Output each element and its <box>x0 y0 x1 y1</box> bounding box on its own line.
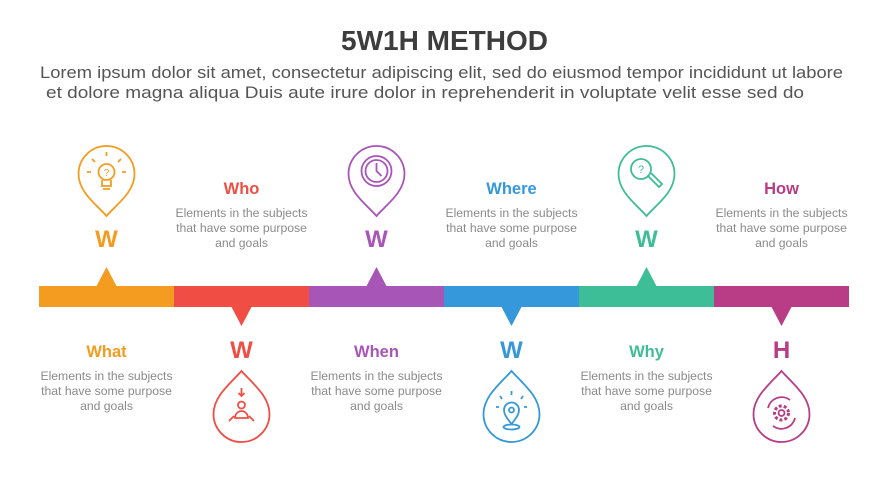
text: when: and goals <box>350 399 403 413</box>
text: why <box>580 343 713 413</box>
text: where: and goals <box>485 236 538 250</box>
icon: what pin (lightbulb): ? <box>104 168 110 179</box>
title: 5W1H METHOD <box>341 25 548 56</box>
text: who: Elements in the subjects <box>175 206 308 220</box>
text: how <box>715 180 848 250</box>
text: why: that have some purpose <box>581 384 712 398</box>
text: what <box>40 343 173 413</box>
subtitle: et dolore magna aliqua Duis aute irure dolor in reprehenderit in voluptate velit esse sed do <box>46 84 804 102</box>
text: who: Who <box>224 180 259 198</box>
text: how: How <box>764 180 799 198</box>
text: what: Elements in the subjects <box>40 369 173 383</box>
letter why: W <box>635 226 658 253</box>
icon: who drop (person) <box>213 371 270 442</box>
text: how: Elements in the subjects <box>715 206 848 220</box>
letter how: H <box>773 337 790 364</box>
text: how: that have some purpose <box>716 221 847 235</box>
text: what: that have some purpose <box>41 384 172 398</box>
icon: what pin (lightbulb) <box>78 146 134 216</box>
icon: where drop (location) <box>484 371 540 442</box>
icon: when pin (clock) <box>348 146 404 216</box>
text: where: Elements in the subjects <box>445 206 578 220</box>
text: when: that have some purpose <box>311 384 442 398</box>
text: why: and goals <box>620 399 673 413</box>
text: who <box>175 180 308 250</box>
subtitle <box>40 64 843 102</box>
text: what: What <box>86 343 127 361</box>
timeline bar <box>39 267 849 326</box>
text: why: Why <box>629 343 665 361</box>
text: where: that have some purpose <box>446 221 577 235</box>
text: who: that have some purpose <box>176 221 307 235</box>
text: where <box>445 180 578 250</box>
letter who: W <box>230 337 253 364</box>
subtitle: Lorem ipsum dolor sit amet, consectetur adipiscing elit, sed do eiusmod tempor incididunt ut labore <box>40 64 843 82</box>
text: when: When <box>354 343 399 361</box>
icon: why pin (magnifier): ? <box>638 164 644 176</box>
icon: how drop (gear) <box>754 371 810 442</box>
text: how: and goals <box>755 236 808 250</box>
text: why: Elements in the subjects <box>580 369 713 383</box>
letter what: W <box>95 226 118 253</box>
letter where: W <box>500 337 523 364</box>
icon: why pin (magnifier) <box>618 146 674 216</box>
letter when: W <box>365 226 388 253</box>
text: when <box>310 343 443 413</box>
text: when: Elements in the subjects <box>310 369 443 383</box>
text: what: and goals <box>80 399 133 413</box>
text: who: and goals <box>215 236 268 250</box>
text: where: Where <box>486 180 537 198</box>
